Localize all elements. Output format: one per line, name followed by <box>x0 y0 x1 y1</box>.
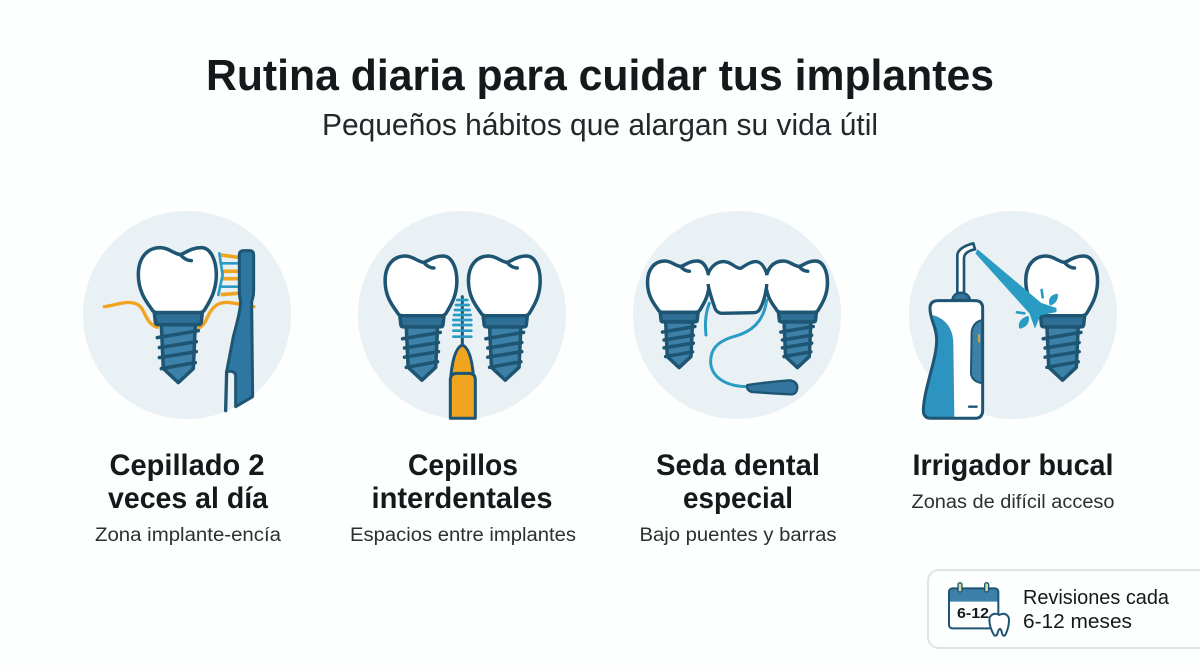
icon: dental floss under bridge <box>648 261 827 394</box>
circle background <box>633 211 841 419</box>
circle background <box>83 211 291 419</box>
card <box>928 570 1200 648</box>
circle background <box>909 211 1117 419</box>
panel: interdentales <box>350 211 576 546</box>
panel: seda dental <box>633 211 841 546</box>
callout: revisiones <box>928 570 1200 648</box>
description: Zonas de difícil acceso <box>912 492 1114 513</box>
heading <box>372 449 552 515</box>
heading: Cepillado 2 <box>110 449 264 482</box>
heading <box>108 449 268 515</box>
heading: veces al día <box>108 482 268 515</box>
heading: especial <box>683 482 793 515</box>
callout text: Revisiones cada <box>1023 587 1170 609</box>
icon: water flosser and implant <box>923 243 1098 418</box>
callout text <box>1023 587 1170 633</box>
heading: interdentales <box>372 482 552 515</box>
callout text: 6-12 meses <box>1023 611 1132 633</box>
description: Espacios entre implantes <box>350 525 576 546</box>
panel: cepillado <box>83 211 291 546</box>
icon: calendar with tooth <box>949 583 1009 636</box>
icon: toothbrush and implant <box>104 248 254 411</box>
calendar label: 6-12 <box>957 605 989 622</box>
heading: Cepillos <box>408 449 518 482</box>
icon: interdental brush and implants <box>385 256 540 418</box>
panel: irrigador <box>909 211 1117 513</box>
description: Zona implante-encía <box>95 525 281 546</box>
circle background <box>358 211 566 419</box>
subtitle: Pequeños hábitos que alargan su vida útil <box>322 107 878 142</box>
title: Rutina diaria para cuidar tus implantes <box>206 51 994 100</box>
description: Bajo puentes y barras <box>640 525 836 546</box>
heading: Seda dental <box>656 449 820 482</box>
heading <box>656 449 820 515</box>
heading: Irrigador bucal <box>912 449 1114 482</box>
